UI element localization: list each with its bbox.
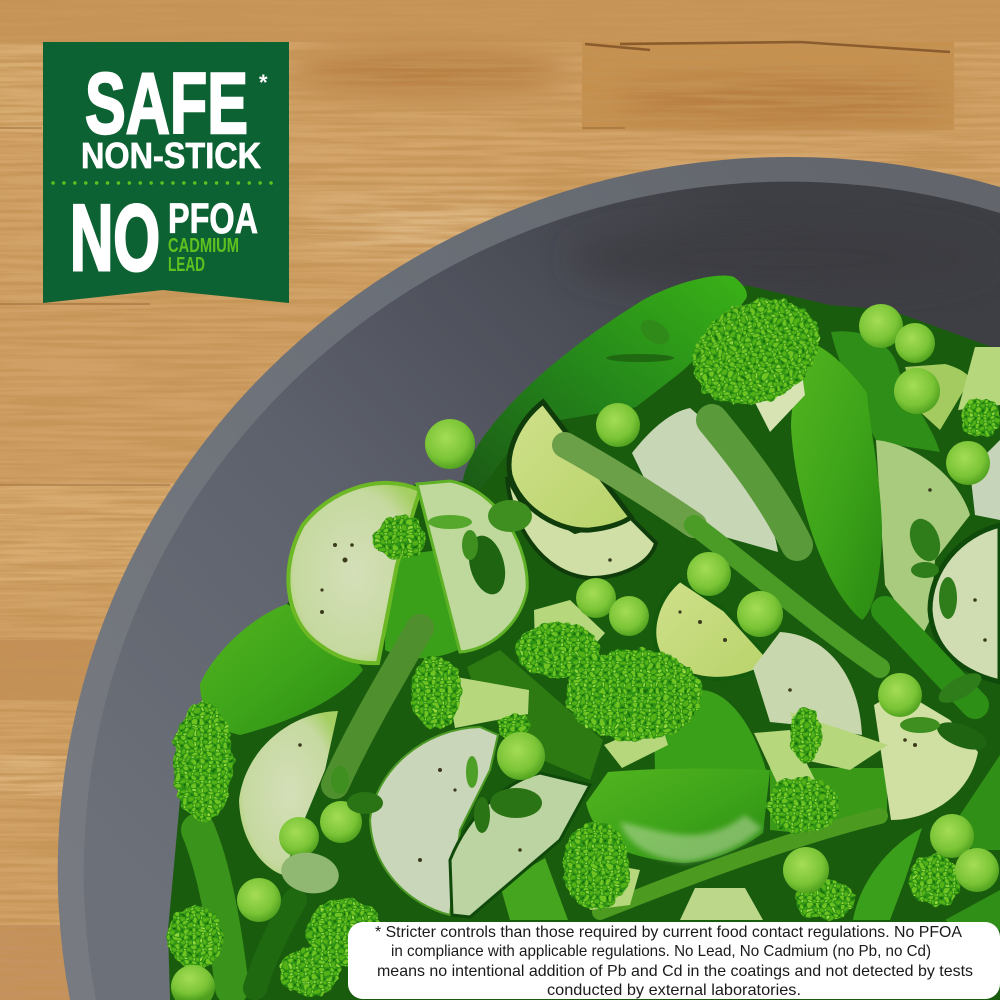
label: LEAD: LEAD [168,254,205,276]
zucchini E [632,408,778,552]
zucchini slices [239,364,1000,920]
footnote panel [348,922,1000,999]
footnote background [348,922,1000,999]
zucchini F [654,580,772,679]
zucchini bottom [680,888,763,920]
asparagus spears [198,420,975,988]
label: CADMIUM: CADMIUM [168,235,239,257]
grey frying pan [58,157,1000,1000]
dotted divider [53,181,279,185]
asterisk: * [259,70,268,95]
pan outer rim [58,157,1000,1000]
zucchini C [509,402,631,530]
vegetable stir-fry [167,276,1000,1000]
zucchini B [417,481,527,652]
broccoli florets [167,279,1000,996]
ribbon background [43,42,289,303]
big pod [791,343,882,620]
green peas [171,304,999,1000]
zucchini H [876,440,970,640]
footnote text: means no intentional addition of Pb and Cd in the coatings and not detected by tests [377,963,973,980]
zucchini K [239,711,338,875]
heading: PFOA: PFOA [168,195,258,243]
footnote text: in compliance with applicable regulations. No Lead, No Cadmium (no Pb, no Cd) [391,943,931,960]
footnote text: conducted by external laboratories. [547,982,801,999]
heading: NON-STICK: NON-STICK [81,135,261,176]
dark base of vegetables [168,285,1000,1000]
footnote text [375,924,973,999]
zucchini L [370,727,498,915]
heading: NO: NO [70,185,160,290]
zucchini M [450,773,590,917]
pan inner wall [84,182,1000,1000]
zucchini G [753,632,862,735]
snow pea front [586,343,882,863]
zucchini A [288,483,420,663]
basil leaves [278,315,990,898]
pepper specks [298,488,987,862]
zucchini J [874,690,978,820]
broccoli stems [445,347,1000,910]
zucchini D [507,477,656,578]
heading: SAFE: SAFE [85,56,248,152]
bottom pod [586,769,770,863]
zucchini I [930,525,1000,682]
snow peas [200,276,1000,930]
badge: safe non-stick ribbon [43,42,289,303]
footnote text: * Stricter controls than those required by current food contact regulations. No PFOA [375,924,962,941]
